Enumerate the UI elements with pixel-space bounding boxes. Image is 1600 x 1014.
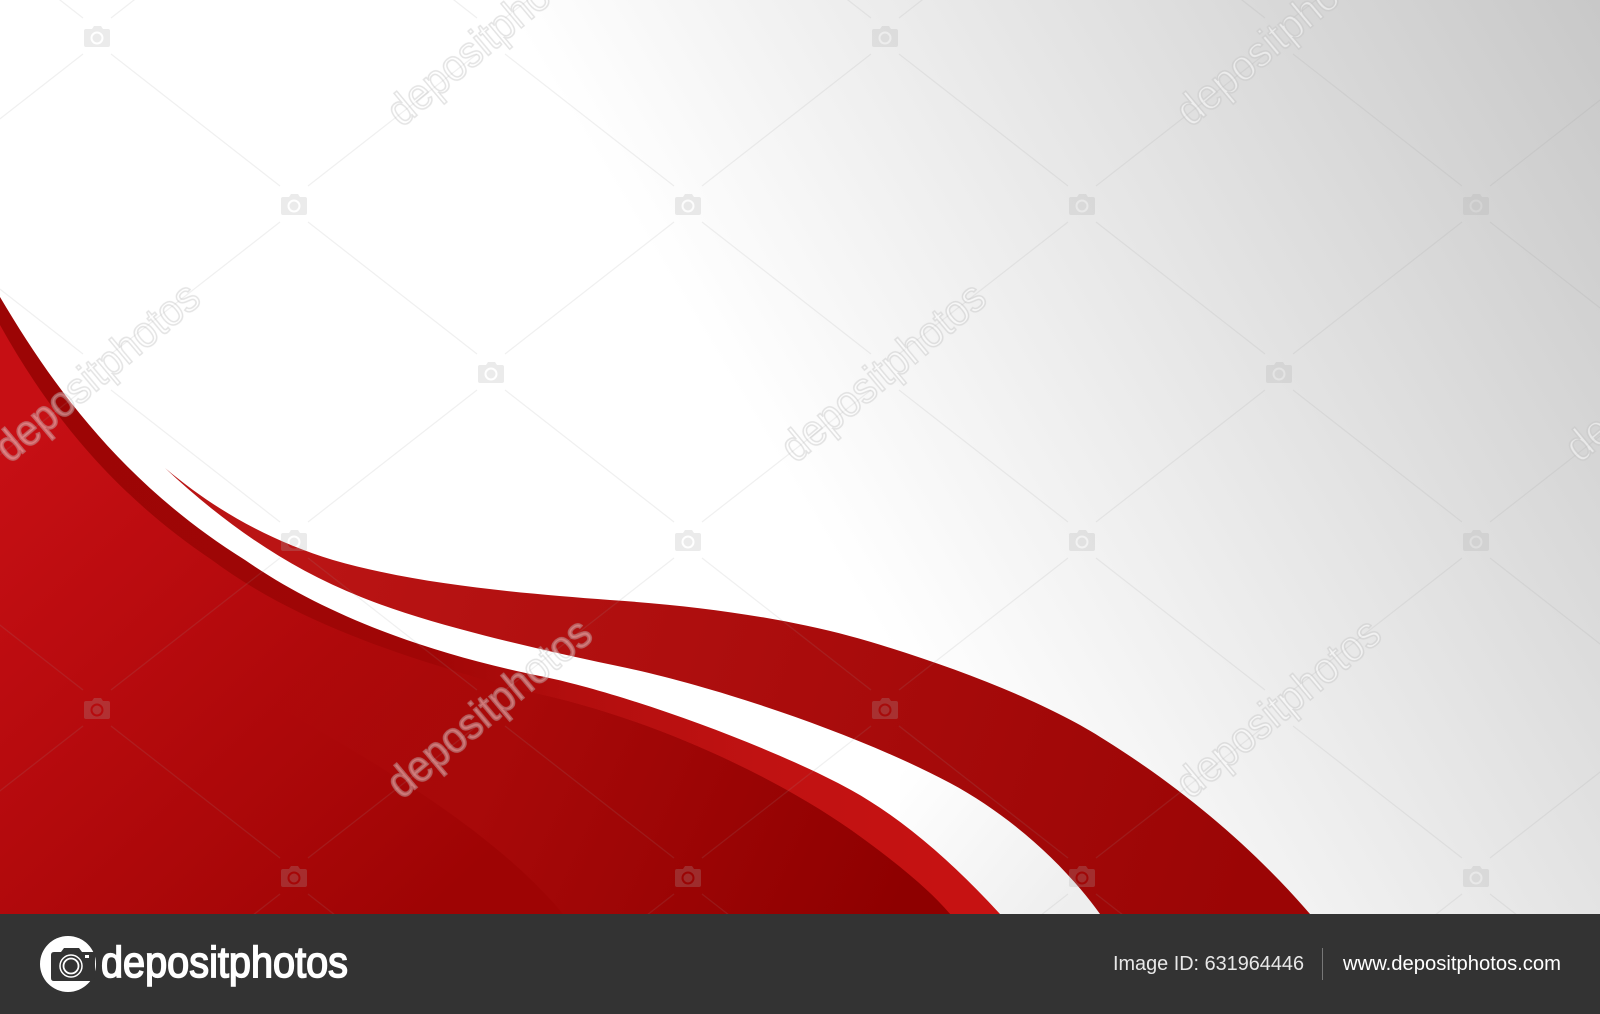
footer bar bbox=[0, 914, 1600, 1014]
upper red ribbon bbox=[165, 468, 1310, 914]
icon: depositphotos camera logo bbox=[40, 936, 96, 992]
website URL: www.depositphotos.com bbox=[1342, 952, 1561, 975]
dark edge strip and bright red ribbon bbox=[0, 297, 1000, 914]
watermark: depositphotos text repeats: depositphotos bbox=[1166, 608, 1390, 808]
main red wave bbox=[0, 325, 950, 914]
image ID: Image ID: 631964446 bbox=[1113, 952, 1304, 975]
logo wordmark: depositphotos bbox=[101, 938, 348, 987]
watermark: depositphotos text repeats bbox=[0, 0, 1600, 808]
watermark: depositphotos text repeats: depositphotos bbox=[377, 608, 601, 808]
dark red inner wave bbox=[130, 560, 950, 914]
watermark: depositphotos text repeats: depositphotos bbox=[771, 272, 995, 472]
watermark: camera icons bbox=[84, 26, 1489, 887]
white ribbon shading bbox=[900, 700, 1200, 914]
